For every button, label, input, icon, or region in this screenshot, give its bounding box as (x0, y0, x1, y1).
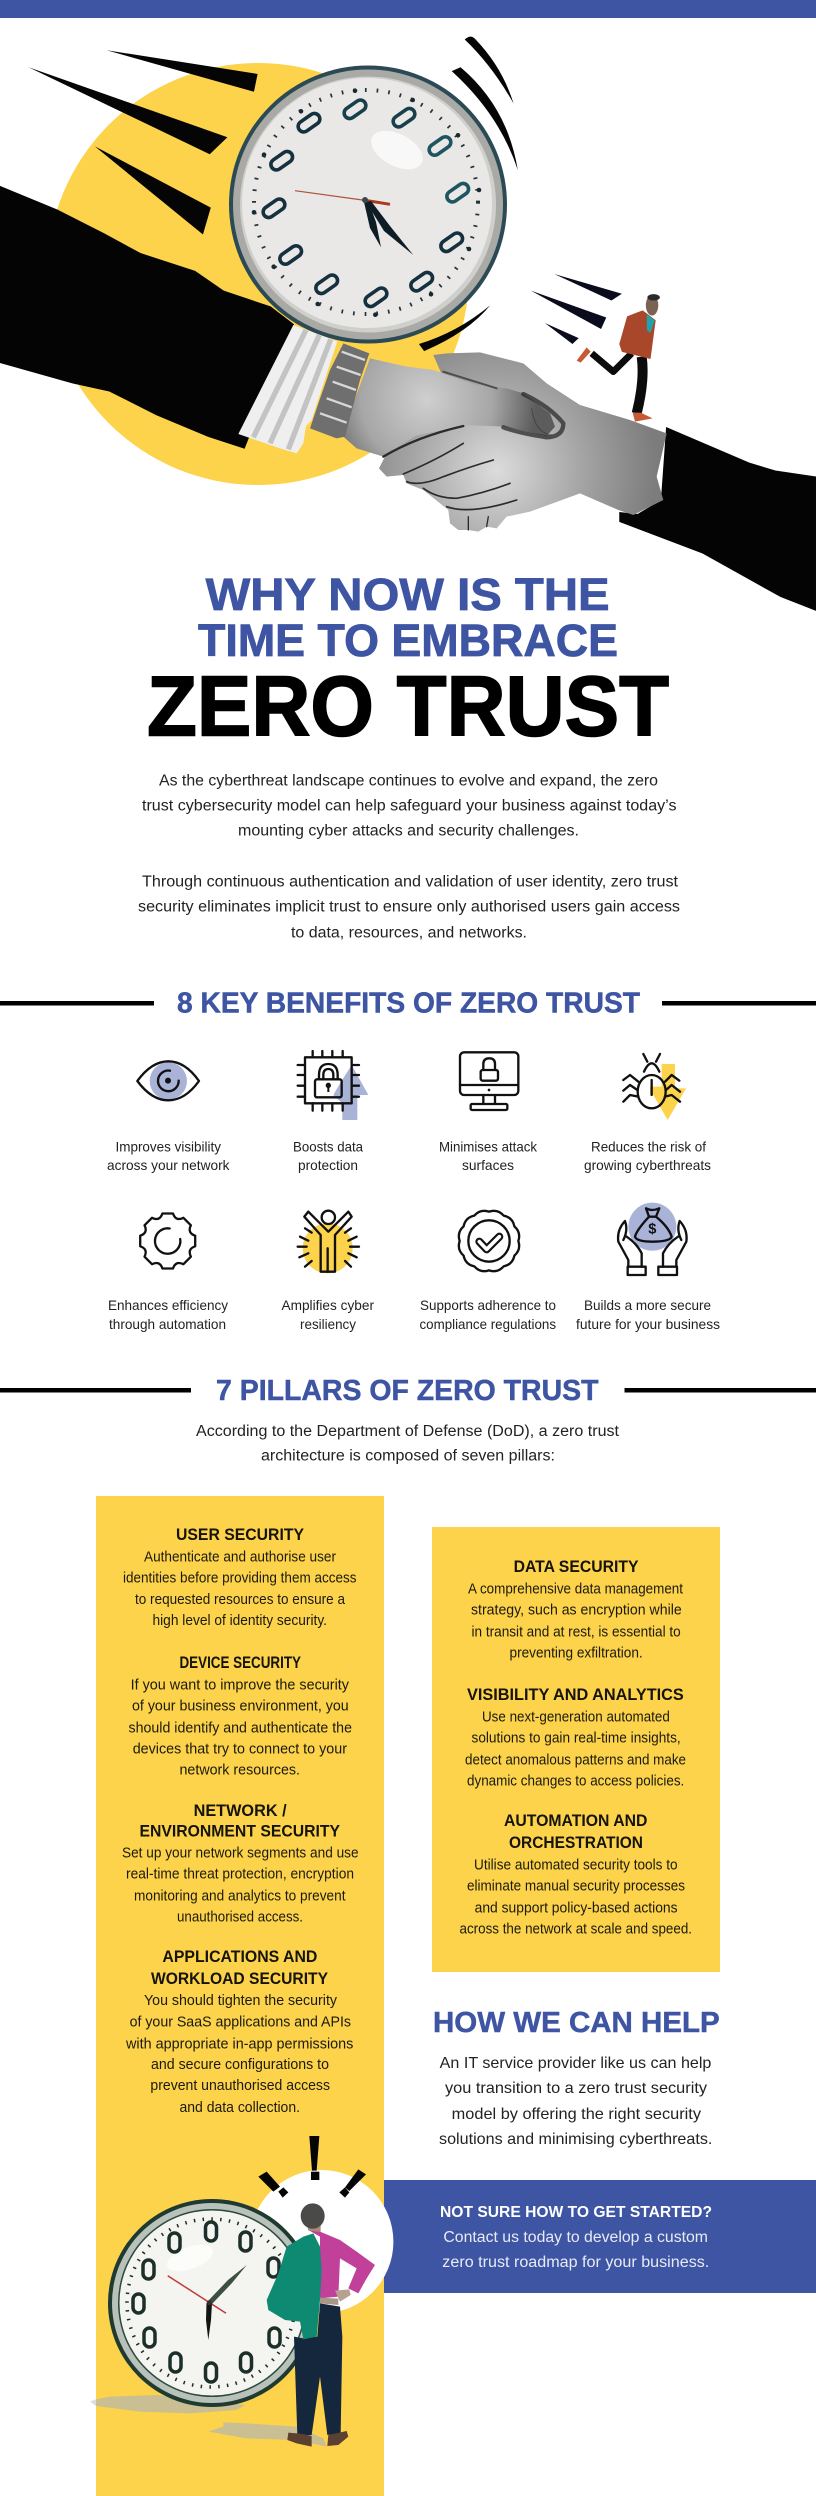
pillars intro: architecture is composed of seven pillars: (261, 1448, 555, 1465)
pillar: user security: identities before providing them access (123, 1570, 356, 1586)
pillar: user security (123, 1525, 356, 1629)
wristwatch (310, 343, 369, 438)
title: WHY NOW IS THE (206, 569, 610, 620)
pillar: applications and workload security: APPLICATIONS AND (162, 1947, 317, 1966)
pillar: device security: devices that try to connect to your (133, 1741, 347, 1757)
how we can help text (439, 2055, 712, 2148)
benefit label: resiliency (282, 1297, 374, 1332)
call to action banner (384, 2180, 816, 2293)
pillar: applications and workload security: of your SaaS applications and APIs (130, 2014, 351, 2030)
pillar: device security: If you want to improve the security (131, 1677, 350, 1693)
benefit label: cyberthreats: growing cyberthreats (584, 1157, 711, 1173)
sleeves (0, 186, 816, 611)
white circle (250, 2170, 393, 2313)
title: TIME TO EMBRACE (198, 615, 618, 666)
pillar: network environment security: monitoring and analytics to prevent (134, 1888, 346, 1904)
man from behind (267, 2203, 375, 2447)
benefit label: resiliency: Amplifies cyber (282, 1297, 374, 1313)
pillar: network environment security: Set up your network segments and use (122, 1845, 359, 1861)
title (147, 569, 669, 755)
pillar: device security: should identify and authenticate the (128, 1720, 352, 1736)
heading: 8 key benefits (0, 988, 816, 1020)
pillar: automation and orchestration: ORCHESTRATION (509, 1833, 643, 1852)
heading: 8 key benefits: 8 KEY BENEFITS OF ZERO TRUST (177, 988, 640, 1020)
benefit label: cyberthreats (584, 1139, 711, 1173)
pillar: device security (128, 1653, 352, 1779)
running man torso (619, 294, 660, 359)
pillars intro (196, 1423, 620, 1465)
running man legs (592, 353, 643, 413)
intro text: mounting cyber attacks and security challenges. (238, 822, 579, 839)
benefit label: attack surfaces (439, 1139, 538, 1173)
icon: money bag in hands: $ (648, 1222, 656, 1238)
intro text: As the cyberthreat landscape continues to evolve and expand, the zero (159, 773, 658, 790)
benefit label: attack surfaces: Minimises attack (439, 1139, 538, 1155)
pillar: automation and orchestration: and support policy-based actions (475, 1900, 678, 1916)
icon: large clock (108, 2199, 316, 2407)
icon: money bag in hands (618, 1203, 687, 1275)
right hand (379, 352, 667, 532)
pillar: data security: in transit and at rest, is essential to (472, 1624, 681, 1640)
how we can help text: An IT service provider like us can help (440, 2055, 711, 2072)
benefit label: data protection: protection (298, 1157, 358, 1173)
pillar: applications and workload security: You should tighten the security (144, 1993, 338, 2009)
benefit label: visibility: Improves visibility (116, 1139, 221, 1155)
pillar: device security: of your business environment, you (132, 1699, 349, 1715)
pillar: network environment security: real-time threat protection, encryption (126, 1866, 354, 1882)
pillar: applications and workload security: and secure configurations to (151, 2057, 329, 2073)
benefit label: automation: through automation (109, 1316, 226, 1332)
pillar: device security: network resources. (180, 1763, 300, 1779)
intro text (138, 773, 680, 941)
benefit label: visibility (107, 1139, 230, 1173)
pillar: data security: preventing exfiltration. (510, 1645, 643, 1661)
pillar: visibility and analytics (465, 1685, 686, 1789)
pillar: visibility and analytics: Use next-generation automated (482, 1709, 670, 1725)
icon: eye (137, 1061, 199, 1100)
benefit label: automation (108, 1297, 228, 1332)
benefit label: future (576, 1297, 720, 1332)
intro text: security eliminates implicit trust to ensure only authorised users gain access (138, 899, 680, 916)
icon: monitor lock (460, 1052, 518, 1110)
how we can help text: solutions and minimising cyberthreats. (439, 2131, 712, 2148)
intro text: Through continuous authentication and validation of user identity, zero trust (142, 874, 679, 891)
how we can help text: model by offering the right security (452, 2106, 701, 2123)
call to action banner: Contact us today to develop a custom (443, 2229, 708, 2246)
alert marks and shadows (90, 2136, 366, 2447)
benefit label: compliance: Supports adherence to (420, 1297, 556, 1313)
illustration: man looking at clock (90, 2136, 393, 2447)
pillar: applications and workload security: WORKLOAD SECURITY (151, 1969, 329, 1988)
pillar: data security: strategy, such as encryption while (471, 1602, 682, 1618)
running man shoes (577, 347, 653, 422)
panel: benefits grid (107, 1051, 720, 1332)
yellow circle (47, 63, 469, 485)
pillar: data security: DATA SECURITY (514, 1557, 639, 1576)
pillar: applications and workload security: with appropriate in-app permissions (125, 2036, 353, 2052)
pillar: network environment security: NETWORK / (194, 1801, 287, 1820)
benefit label: automation: Enhances efficiency (108, 1297, 228, 1313)
icon: chip lock (298, 1051, 368, 1120)
benefit label: attack surfaces: surfaces (462, 1157, 514, 1173)
benefit label: visibility: across your network (107, 1157, 230, 1173)
pillar: visibility and analytics: solutions to gain real-time insights, (472, 1730, 681, 1746)
top bar (0, 0, 816, 18)
pillars intro: According to the Department of Defense (DoD), a zero trust (196, 1423, 620, 1440)
pillar: data security: A comprehensive data management (468, 1581, 683, 1597)
heading: how we can help: HOW WE CAN HELP (433, 2007, 720, 2039)
pillar: user security: Authenticate and authorise user (144, 1550, 336, 1566)
pillar: network environment security (122, 1801, 359, 1925)
handshake photo (238, 325, 667, 532)
benefit label: compliance (420, 1297, 556, 1332)
pillar: automation and orchestration: across the network at scale and speed. (460, 1921, 692, 1937)
pillar: data security (468, 1557, 683, 1661)
call to action banner: zero trust roadmap for your business. (442, 2254, 709, 2271)
benefit label: data protection (293, 1139, 363, 1173)
hero illustration: handshake and clock (0, 37, 816, 611)
pillar: network environment security: ENVIRONMENT SECURITY (140, 1821, 341, 1840)
benefit label: future: future for your business (576, 1316, 720, 1332)
pillar: visibility and analytics: dynamic changes to access policies. (467, 1773, 684, 1789)
finger creases (383, 372, 563, 530)
pillar: visibility and analytics: detect anomalous patterns and make (465, 1752, 686, 1768)
pillar: visibility and analytics: VISIBILITY AND ANALYTICS (467, 1685, 684, 1704)
icon: bug (623, 1054, 686, 1120)
panel: right pillars (432, 1527, 720, 1972)
icon: compliance badge (459, 1211, 519, 1271)
pillar: user security: USER SECURITY (176, 1525, 305, 1544)
benefit label: data protection: Boosts data (293, 1139, 363, 1155)
intro text: to data, resources, and networks. (291, 924, 527, 941)
pillar: user security: high level of identity security. (152, 1613, 327, 1629)
icon: resilient person (298, 1211, 359, 1273)
pillar: automation and orchestration (460, 1811, 692, 1937)
pillar: network environment security: unauthorised access. (177, 1909, 303, 1925)
how we can help text: you transition to a zero trust security (445, 2080, 707, 2097)
intro text: trust cybersecurity model can help safeguard your business against today’s (142, 798, 677, 815)
speed lines (29, 37, 622, 351)
heading: 7 pillars (0, 1375, 816, 1407)
title: ZERO TRUST (147, 660, 669, 755)
icon: gear (140, 1214, 195, 1268)
call to action banner: NOT SURE HOW TO GET STARTED? (440, 2204, 712, 2221)
benefit label: future: Builds a more secure (584, 1297, 711, 1313)
shirt cuff (238, 325, 337, 453)
pillar: applications and workload security: and data collection. (180, 2100, 300, 2116)
benefit label: compliance: compliance regulations (420, 1316, 556, 1332)
icon: wall clock (229, 66, 507, 344)
left hand (343, 358, 555, 457)
pillar: automation and orchestration: eliminate manual security processes (467, 1878, 685, 1894)
pillar: user security: to requested resources to ensure a (135, 1592, 346, 1608)
panel: left pillars (96, 1496, 384, 2496)
heading: 7 pillars: 7 PILLARS OF ZERO TRUST (216, 1375, 599, 1407)
pillar: device security: DEVICE SECURITY (180, 1653, 302, 1672)
benefit label: resiliency: resiliency (300, 1316, 356, 1332)
pillar: automation and orchestration: AUTOMATION AND (504, 1811, 647, 1830)
benefit label: cyberthreats: Reduces the risk of (591, 1139, 706, 1155)
pillar: applications and workload security (125, 1947, 353, 2116)
pillar: automation and orchestration: Utilise automated security tools to (474, 1857, 678, 1873)
pillar: applications and workload security: prevent unauthorised access (150, 2078, 330, 2094)
